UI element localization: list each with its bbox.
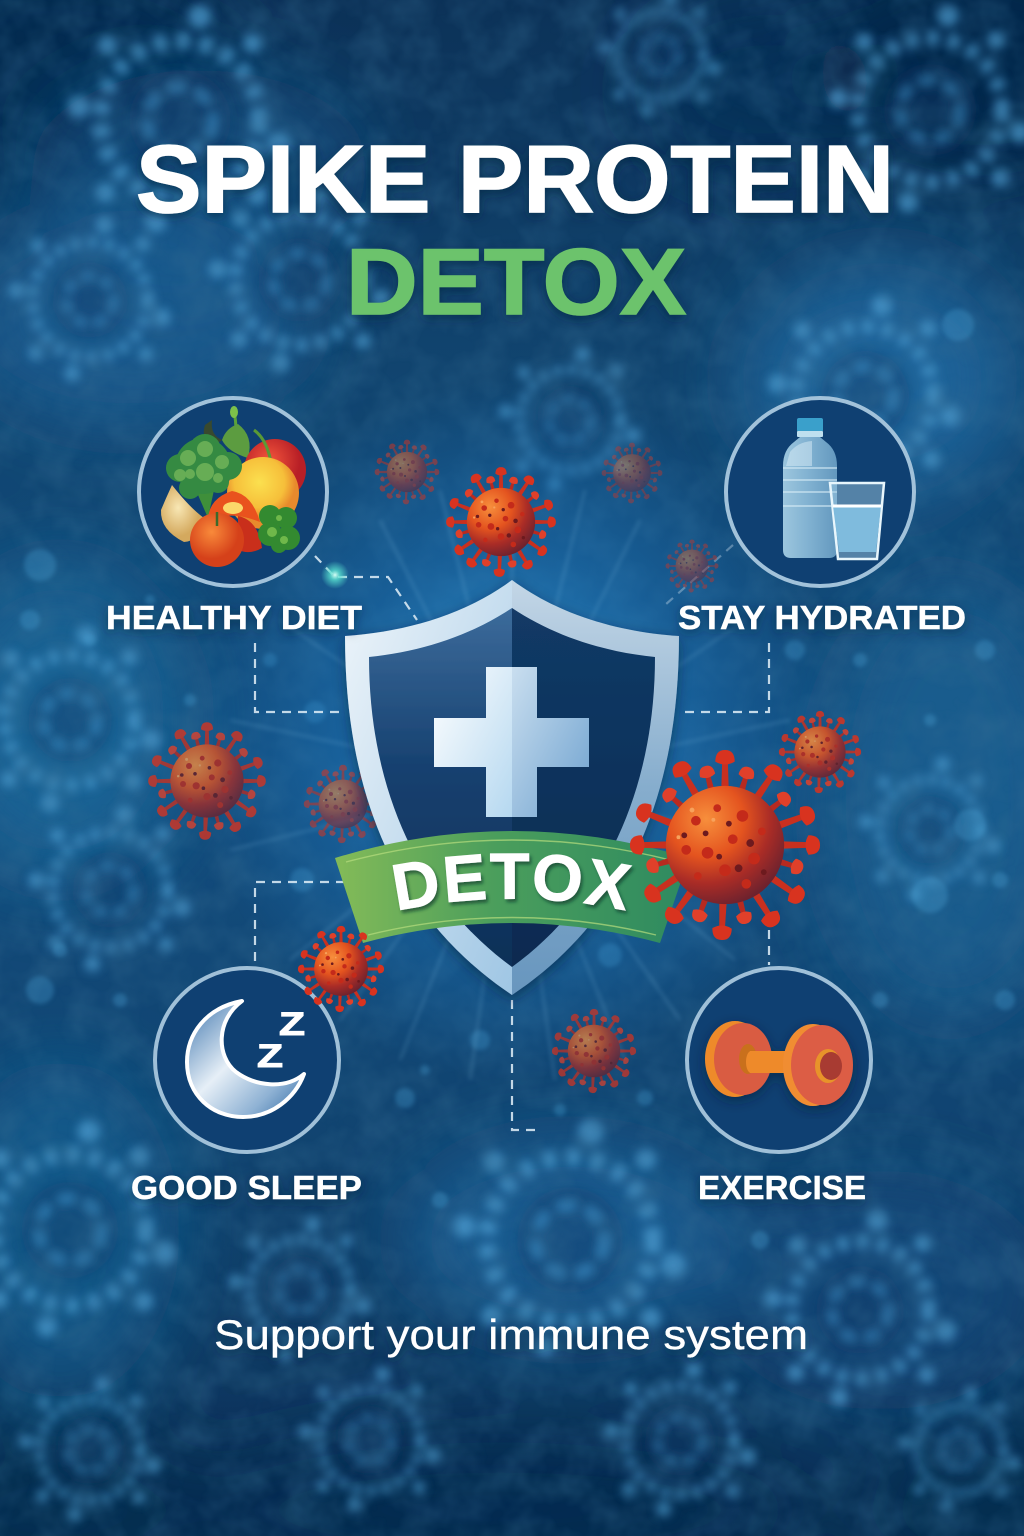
icon: bottle [783,418,837,558]
panel: healthy diet [139,398,327,586]
circle badge [155,968,339,1152]
icon: dumbbell [705,1021,853,1106]
medical cross [434,667,589,817]
connector lines [255,545,769,1130]
background viruses [148,440,861,1093]
icon: sleep letters: Z [257,1038,283,1074]
panel: stay hydrated [726,398,914,586]
icon: sleep letters [257,1006,305,1074]
label: exercise: EXERCISE [698,1169,866,1206]
shield [345,580,679,995]
banner [335,831,680,943]
panel: exercise [687,968,871,1152]
banner text: DETOX [392,853,634,915]
shield inner [369,608,512,967]
icon: vegetables [161,406,306,567]
panel: good sleep [155,968,339,1152]
circle badge [726,398,914,586]
label: stay hydrated: STAY HYDRATED [678,599,966,636]
label: healthy diet: HEALTHY DIET [106,599,362,636]
circle badge [139,398,327,586]
title [136,126,894,334]
connector glow [321,561,349,589]
labels [106,599,966,1206]
tagline: Support your immune system [214,1311,808,1358]
title line 1: SPIKE PROTEIN [136,126,894,233]
icon: glass [830,483,884,559]
circle badge [687,968,871,1152]
shield frame [345,580,512,995]
icon: sleep letters: Z [279,1006,305,1042]
front viruses [298,750,820,1012]
label: good sleep: GOOD SLEEP [131,1169,362,1206]
title line 2: DETOX [346,229,686,334]
icon: moon [187,1001,304,1117]
burst behind shield [192,380,832,1080]
